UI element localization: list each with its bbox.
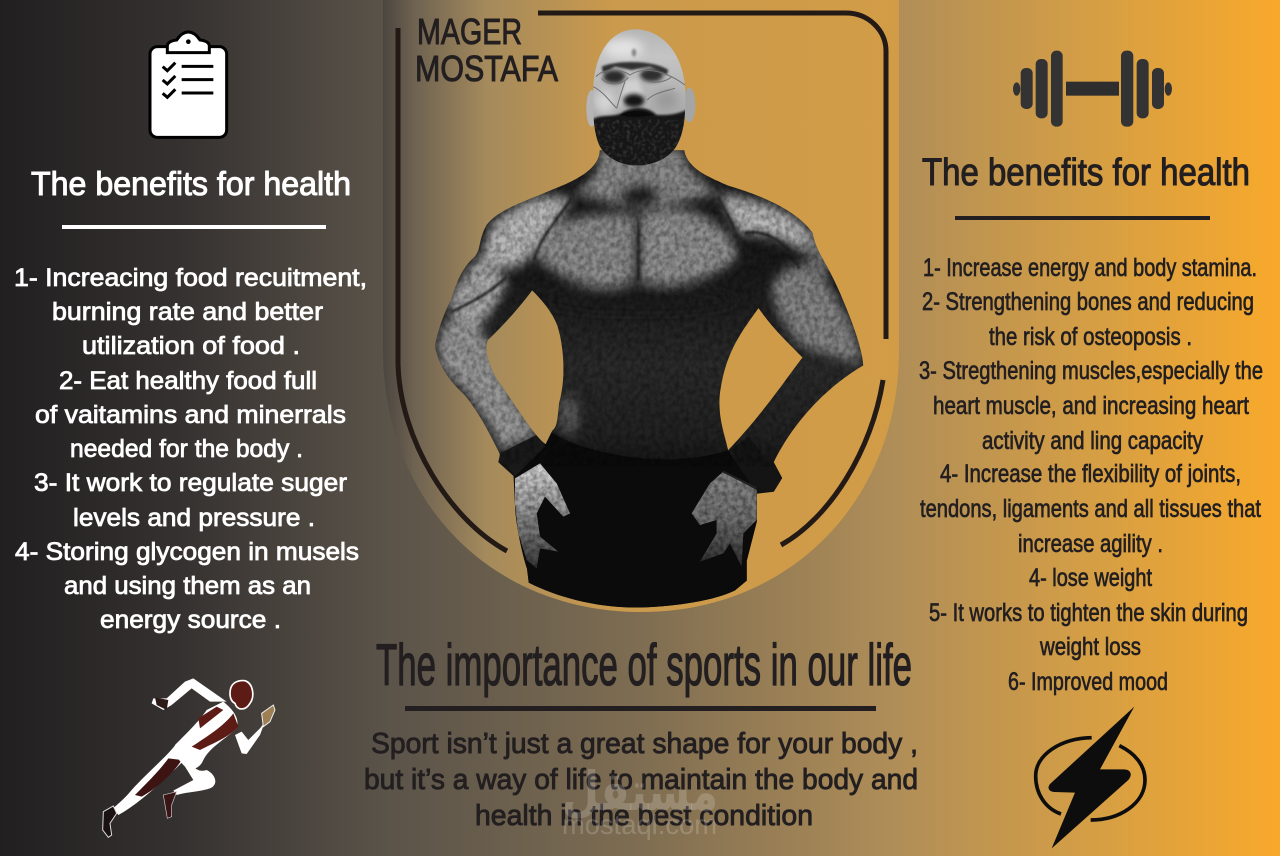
front leg xyxy=(173,760,215,795)
title: The importance of sports in our life xyxy=(376,633,912,698)
glasses xyxy=(593,70,685,108)
label: author name: MAGER xyxy=(417,11,522,52)
text block: left benefits list: levels and pressure . xyxy=(73,504,315,532)
text block: left benefits list: energy source . xyxy=(100,606,281,634)
muscle texture xyxy=(414,158,887,466)
heading: left benefits: The benefits for health xyxy=(31,165,351,202)
icon: clipboard checklist xyxy=(150,32,227,137)
torso xyxy=(174,702,238,769)
panel: portrait shield xyxy=(383,0,899,612)
shield outline segments xyxy=(398,13,886,551)
title divider xyxy=(405,706,876,711)
text block: right benefits list: 6- Improved mood xyxy=(1008,668,1168,696)
text block: intro paragraph: health in the best condition xyxy=(475,800,813,832)
icon: dumbbell xyxy=(1013,51,1172,127)
watermark: mostaql.com xyxy=(562,809,717,840)
divider right xyxy=(955,216,1210,220)
label: author name: MOSTAFA xyxy=(415,48,558,89)
head xyxy=(586,29,695,167)
photo: muscular man xyxy=(435,29,864,608)
text block: right benefits list: weight loss xyxy=(1039,633,1141,661)
text block: right benefits list: 4- lose weight xyxy=(1029,564,1152,592)
text block: intro paragraph xyxy=(364,728,918,832)
text block: left benefits list: burning rate and better xyxy=(52,298,323,326)
icon: lightning bolt in ring xyxy=(1036,707,1145,848)
rear arm xyxy=(152,678,227,710)
shorts xyxy=(515,431,757,608)
head xyxy=(230,681,253,709)
text block: left benefits list: 4- Storing glycogen in musels xyxy=(15,538,359,566)
text block: left benefits list: of vaitamins and minerrals xyxy=(35,401,346,429)
watermark: مستقل xyxy=(562,760,718,823)
text block: left benefits list: utilization of food . xyxy=(82,332,300,360)
text block: left benefits list: and using them as an xyxy=(64,572,311,600)
text block: left benefits list xyxy=(14,264,367,634)
wrist straps xyxy=(498,434,546,476)
text block: left benefits list: 1- Increacing food recuitment, xyxy=(14,264,367,292)
forehead highlight xyxy=(603,38,643,58)
text block: left benefits list: 3- It work to regulate suger xyxy=(34,469,347,497)
label: author name xyxy=(415,11,558,89)
beard xyxy=(592,108,687,167)
text block: intro paragraph: Sport isn’t just a great shape for your body , xyxy=(371,728,918,760)
hands xyxy=(510,460,763,570)
muscle lines xyxy=(451,198,799,312)
ears xyxy=(586,90,597,127)
text block: left benefits list: needed for the body . xyxy=(70,435,303,463)
text block: right benefits list xyxy=(919,254,1263,696)
torso and arms xyxy=(435,150,864,608)
text block: right benefits list: activity and ling capacity xyxy=(982,427,1203,455)
icon: running man xyxy=(103,678,275,837)
watermark xyxy=(562,760,718,840)
text block: right benefits list: increase agility . xyxy=(1018,530,1163,558)
divider left xyxy=(62,225,326,229)
text block: left benefits list: 2- Eat healthy food full xyxy=(59,367,317,395)
rear shoe xyxy=(103,806,117,837)
text block: intro paragraph: but it’s a way of life to maintain the body and xyxy=(364,764,918,796)
front arm xyxy=(235,722,265,754)
text block: right benefits list: the risk of osteoposis . xyxy=(989,323,1192,351)
rear leg xyxy=(113,743,188,815)
